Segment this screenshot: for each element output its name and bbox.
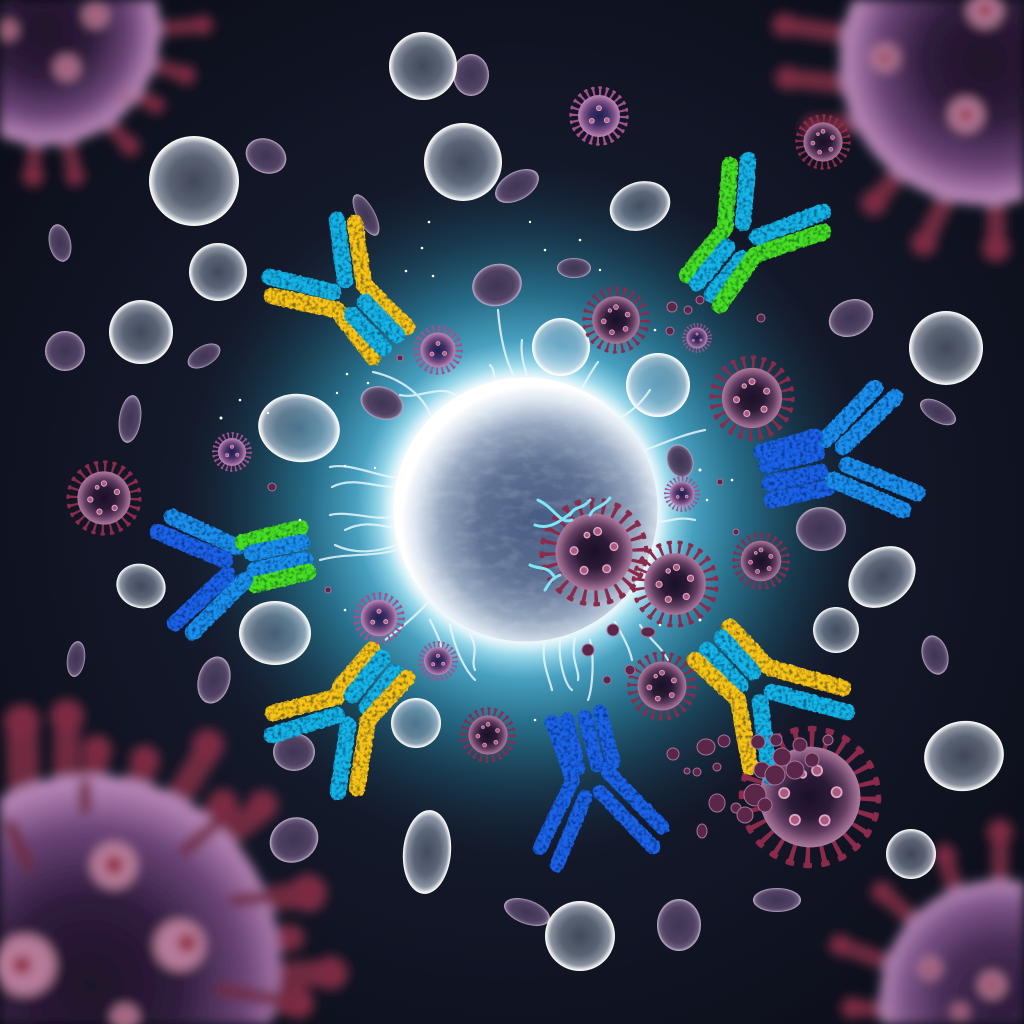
virus: top right xyxy=(772,0,1024,262)
virus xyxy=(584,288,648,352)
virus xyxy=(461,708,515,762)
virus xyxy=(414,326,462,374)
antibody: left blue and green xyxy=(158,517,308,632)
antibody: top left yellow and cyan xyxy=(270,220,407,357)
central immune cell xyxy=(388,372,662,646)
virus beside cell xyxy=(630,539,720,629)
virus xyxy=(419,642,457,680)
virus xyxy=(665,477,699,511)
virus: top left xyxy=(0,0,213,187)
antibody: lower left yellow and cyan xyxy=(272,650,407,792)
viruses xyxy=(68,88,894,881)
virus xyxy=(733,533,789,589)
virus being destroyed xyxy=(726,713,894,881)
virus xyxy=(570,88,628,144)
virus xyxy=(796,115,850,169)
antibody: lower right yellow and cyan xyxy=(695,627,847,777)
antibody: bottom blue xyxy=(540,712,662,865)
virus attached to cell xyxy=(533,491,655,613)
virus debris xyxy=(268,296,833,838)
virus: bottom left xyxy=(0,699,348,1024)
virus xyxy=(213,433,251,471)
virus xyxy=(629,653,695,719)
cyan strands on attached virus xyxy=(530,498,610,590)
antibody: right blue xyxy=(762,388,917,510)
cell tendrils xyxy=(320,310,705,700)
floating particles xyxy=(220,221,733,721)
virus xyxy=(683,324,711,352)
virus xyxy=(68,462,140,534)
virus xyxy=(711,357,793,439)
central glow xyxy=(180,165,870,855)
virus: bottom right xyxy=(829,819,1024,1024)
virus xyxy=(354,593,404,643)
antibody: top right green and cyan xyxy=(687,160,823,305)
purple blood cells xyxy=(45,54,960,951)
